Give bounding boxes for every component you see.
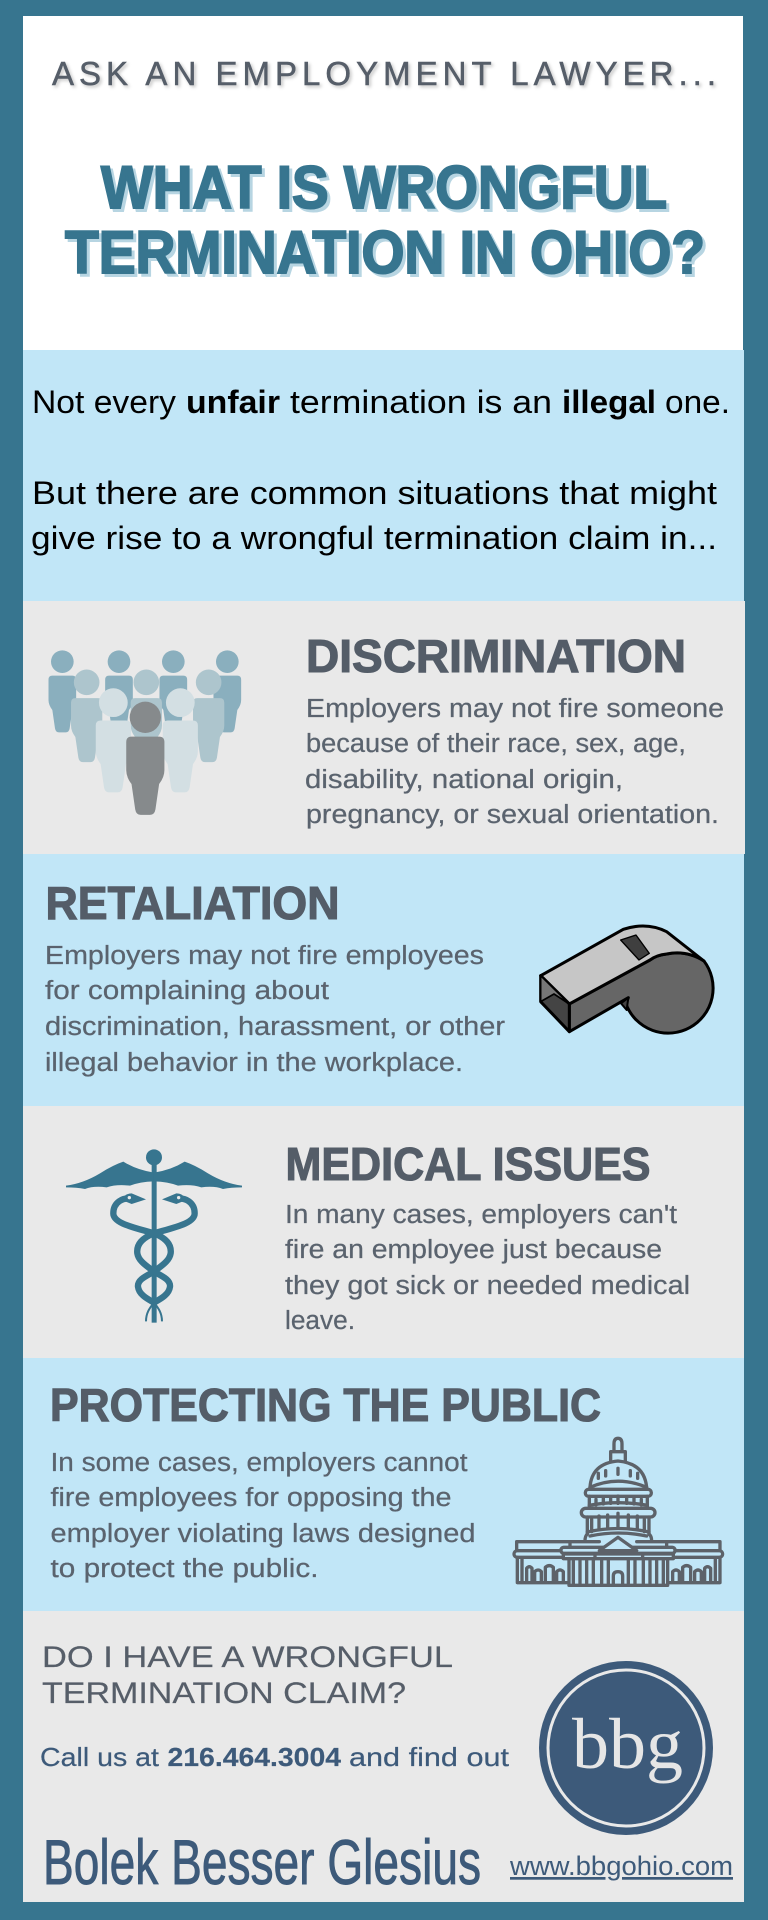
title: WHAT IS WRONGFUL (101, 154, 667, 221)
text: retaliation body: discrimination, harassment, or other (45, 1013, 506, 1041)
intro sentence: unfair vs illegal: illegal (562, 384, 656, 420)
text: retaliation body: Employers may not fire employees (45, 942, 484, 970)
text: protecting the public body: fire employees for opposing the (50, 1484, 452, 1512)
heading: discrimination: DISCRIMINATION (306, 630, 686, 682)
text: retaliation body: illegal behavior in the workplace. (45, 1049, 463, 1077)
text: retaliation body (45, 942, 506, 1077)
panel: call to action footer (23, 1611, 744, 1902)
text: protecting the public body: In some cases, employers cannot (50, 1449, 467, 1477)
firm name: Bolek Besser Glesius (43, 1828, 481, 1898)
text: medical issues body: leave. (285, 1307, 355, 1335)
icon: capitol building (514, 1438, 723, 1585)
panel: discrimination (23, 601, 745, 854)
icon: whistle (541, 926, 713, 1033)
panel: introduction (23, 350, 744, 601)
icon: group of people (48, 650, 241, 815)
intro sentence: common situations: give rise to a wrongful termination claim in... (31, 520, 717, 556)
text: phone call to action: 216.464.3004 (168, 1742, 342, 1772)
text: discrimination body: pregnancy, or sexual orientation. (306, 801, 719, 829)
text: discrimination body: Employers may not fire someone (306, 695, 724, 723)
text: discrimination body: disability, national origin, (305, 766, 623, 794)
panel: protecting the public (23, 1358, 744, 1611)
title (65, 154, 705, 286)
text: medical issues body: fire an employee just because (285, 1236, 662, 1264)
heading: medical issues: MEDICAL ISSUES (286, 1138, 650, 1190)
website link: www.bbgohio.com (509, 1851, 733, 1881)
text: discrimination body: because of their race, sex, age, (306, 730, 686, 758)
intro sentence: common situations (31, 475, 717, 556)
intro sentence: unfair vs illegal (32, 384, 730, 420)
heading: do I have a claim: DO I HAVE A WRONGFUL (42, 1641, 453, 1674)
text: phone call to action (40, 1742, 510, 1772)
panel: header (23, 16, 743, 350)
text: phone call to action: and find out (349, 1742, 510, 1772)
icon: caduceus (66, 1149, 242, 1323)
text: discrimination body (305, 695, 724, 829)
title: TERMINATION IN OHIO? (65, 219, 705, 286)
kicker: ask an employment lawyer: ASK AN EMPLOYMENT LAWYER... (52, 55, 716, 92)
text: protecting the public body: to protect the public. (50, 1555, 318, 1583)
panel: medical issues (23, 1106, 744, 1358)
text: medical issues body: they got sick or needed medical (285, 1272, 690, 1300)
text: retaliation body: for complaining about (45, 977, 329, 1005)
heading: do I have a claim (42, 1641, 453, 1710)
heading: retaliation: RETALIATION (46, 877, 340, 929)
text: protecting the public body: employer violating laws designed (50, 1520, 476, 1548)
panel: retaliation (23, 854, 744, 1106)
text: medical issues body: In many cases, employers can't (285, 1201, 677, 1229)
text: medical issues body (285, 1201, 690, 1335)
logo: bbg circle: bbg (572, 1704, 683, 1784)
logo: bbg circle (539, 1661, 713, 1835)
intro sentence: unfair vs illegal: termination is an (290, 384, 552, 420)
intro sentence: common situations: But there are common situations that might (32, 475, 717, 511)
text: phone call to action: Call us at (40, 1742, 160, 1772)
heading: do I have a claim: TERMINATION CLAIM? (42, 1677, 406, 1710)
text: protecting the public body (50, 1449, 476, 1583)
intro sentence: unfair vs illegal: Not every (32, 384, 176, 420)
intro sentence: unfair vs illegal: one. (665, 384, 730, 420)
intro sentence: unfair vs illegal: unfair (186, 384, 280, 420)
heading: protecting the public: PROTECTING THE PUBLIC (50, 1379, 601, 1431)
